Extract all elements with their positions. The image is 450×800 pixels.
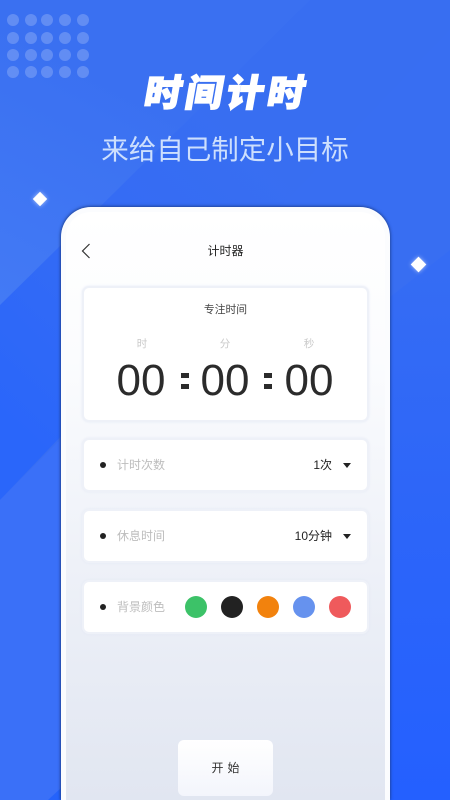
bullet xyxy=(100,533,106,539)
value: 10分钟 xyxy=(295,529,332,543)
panel: colour row xyxy=(82,580,369,634)
value: 1次 xyxy=(313,458,332,472)
dot pattern xyxy=(7,14,89,78)
bullet xyxy=(100,462,106,468)
unit labels: 时 xyxy=(137,338,147,350)
unit labels xyxy=(137,338,314,350)
colour swatches xyxy=(185,596,351,618)
screen title: 计时器 xyxy=(207,244,244,258)
label: 计时次数 xyxy=(117,458,165,472)
unit labels: 分 xyxy=(220,338,230,350)
title: 时间计时 xyxy=(141,73,313,114)
panel: timer card xyxy=(82,286,369,422)
icon: sparkle left xyxy=(33,192,47,206)
card heading: 专注时间 xyxy=(204,304,247,316)
time digits: 00 xyxy=(201,356,249,405)
label: 背景颜色 xyxy=(117,600,165,614)
start button xyxy=(178,740,273,796)
time digits: 00 xyxy=(285,356,333,405)
time digits xyxy=(117,356,333,405)
panel: phone xyxy=(61,207,390,800)
icon: sparkle right xyxy=(411,257,426,272)
time digits: 00 xyxy=(117,356,165,405)
panel: count row xyxy=(82,438,369,492)
dropdown arrow xyxy=(343,463,351,468)
start button: 开始 xyxy=(211,761,244,775)
panel: rest row xyxy=(82,509,369,563)
dropdown arrow xyxy=(343,534,351,539)
bullet xyxy=(100,604,106,610)
phone contents xyxy=(82,244,370,796)
icon: back arrow xyxy=(82,244,90,258)
label: 休息时间 xyxy=(117,529,165,543)
subtitle: 来给自己制定小目标 xyxy=(101,134,349,165)
unit labels: 秒 xyxy=(304,338,314,350)
